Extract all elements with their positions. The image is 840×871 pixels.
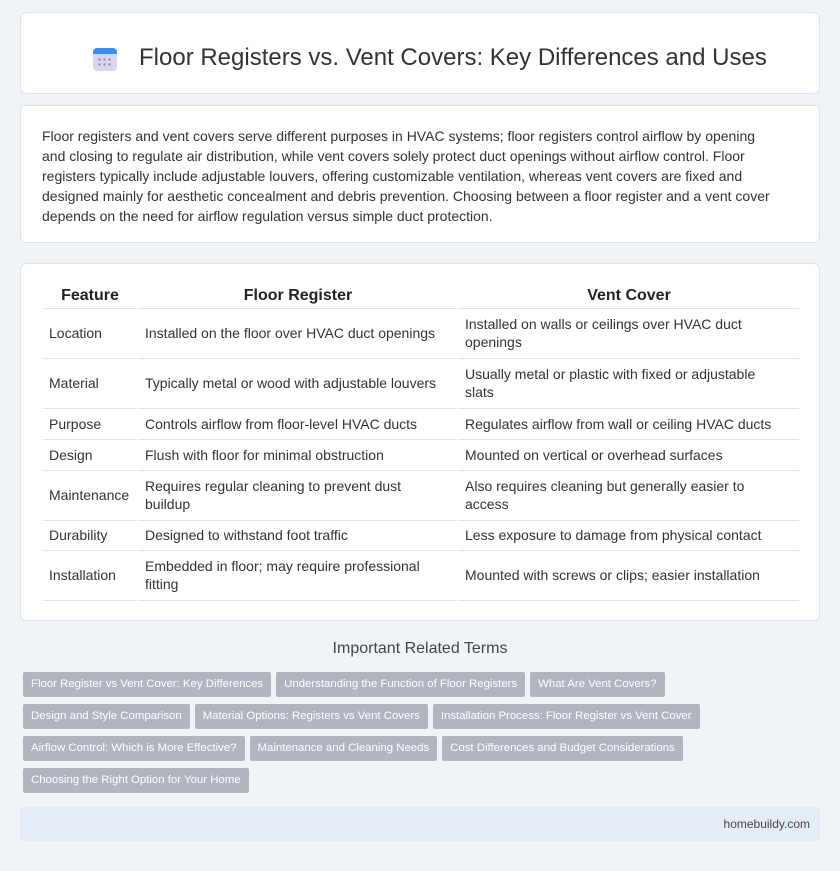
comparison table: Installed on the floor over HVAC duct openings xyxy=(145,325,435,341)
comparison table: Installation xyxy=(49,567,116,583)
intro text card: and closing to regulate air distribution, while vent covers solely protect duct openings without airflow control. Floor xyxy=(42,148,745,164)
title: Floor Registers vs. Vent Covers: Key Differences and Uses xyxy=(139,44,767,71)
comparison table: Design xyxy=(49,446,93,462)
intro text card: designed mainly for aesthetic concealment and debris prevention. Choosing between a floor register and a vent cover xyxy=(42,188,770,204)
intro text card: registers typically include adjustable louvers, offering customizable ventilation, whereas vent covers are fixed and xyxy=(42,168,742,184)
intro text card xyxy=(20,105,820,243)
comparison table: Controls airflow from floor-level HVAC ducts xyxy=(145,416,417,432)
comparison table: Location xyxy=(49,325,102,341)
footer: homebuildy.com xyxy=(724,817,810,831)
related term tags: Material Options: Registers vs Vent Covers xyxy=(203,710,420,722)
related term tags: Cost Differences and Budget Considerations xyxy=(450,742,675,754)
related terms heading: Important Related Terms xyxy=(333,640,507,657)
comparison table: Purpose xyxy=(49,416,101,432)
related term tags: Airflow Control: Which is More Effective? xyxy=(31,742,237,754)
comparison table: Usually metal or plastic with fixed or adjustable slats xyxy=(465,366,755,400)
comparison table: Mounted on vertical or overhead surfaces xyxy=(465,446,723,462)
comparison table: Regulates airflow from wall or ceiling HVAC ducts xyxy=(465,416,771,432)
related term tags: What Are Vent Covers? xyxy=(538,678,657,690)
related term tags: Design and Style Comparison xyxy=(31,710,182,722)
icon: calendar xyxy=(93,48,117,71)
related term tags: Understanding the Function of Floor Registers xyxy=(284,678,517,690)
comparison table card xyxy=(20,263,820,621)
comparison table: Feature xyxy=(61,287,119,304)
comparison table: Designed to withstand foot traffic xyxy=(145,527,348,543)
intro text card: depends on the need for airflow regulation versus simple duct protection. xyxy=(42,208,493,224)
comparison table: Vent Cover xyxy=(587,287,671,304)
comparison table: Typically metal or wood with adjustable louvers xyxy=(145,375,436,391)
related term tags: Choosing the Right Option for Your Home xyxy=(31,774,241,786)
footer xyxy=(20,807,820,841)
comparison table: Floor Register xyxy=(244,287,352,304)
comparison table xyxy=(43,287,799,601)
comparison table: Material xyxy=(49,375,99,391)
comparison table: Embedded in floor; may require professional fitting xyxy=(145,558,420,592)
comparison table: Requires regular cleaning to prevent dust buildup xyxy=(145,478,401,512)
comparison table: Mounted with screws or clips; easier installation xyxy=(465,567,760,583)
comparison table: Durability xyxy=(49,527,107,543)
related term tags: Floor Register vs Vent Cover: Key Differences xyxy=(31,678,263,690)
comparison table: Less exposure to damage from physical contact xyxy=(465,527,762,543)
comparison table: Flush with floor for minimal obstruction xyxy=(145,446,384,462)
header card xyxy=(20,12,820,94)
related term tags: Maintenance and Cleaning Needs xyxy=(258,742,429,754)
intro text card: Floor registers and vent covers serve different purposes in HVAC systems; floor registers control airflow by opening xyxy=(42,128,755,144)
comparison table: Also requires cleaning but generally easier to access xyxy=(465,478,744,512)
comparison table: Installed on walls or ceilings over HVAC duct openings xyxy=(465,316,742,350)
related term tags xyxy=(23,672,700,793)
comparison table: Maintenance xyxy=(49,487,129,503)
related term tags: Installation Process: Floor Register vs Vent Cover xyxy=(441,710,692,722)
